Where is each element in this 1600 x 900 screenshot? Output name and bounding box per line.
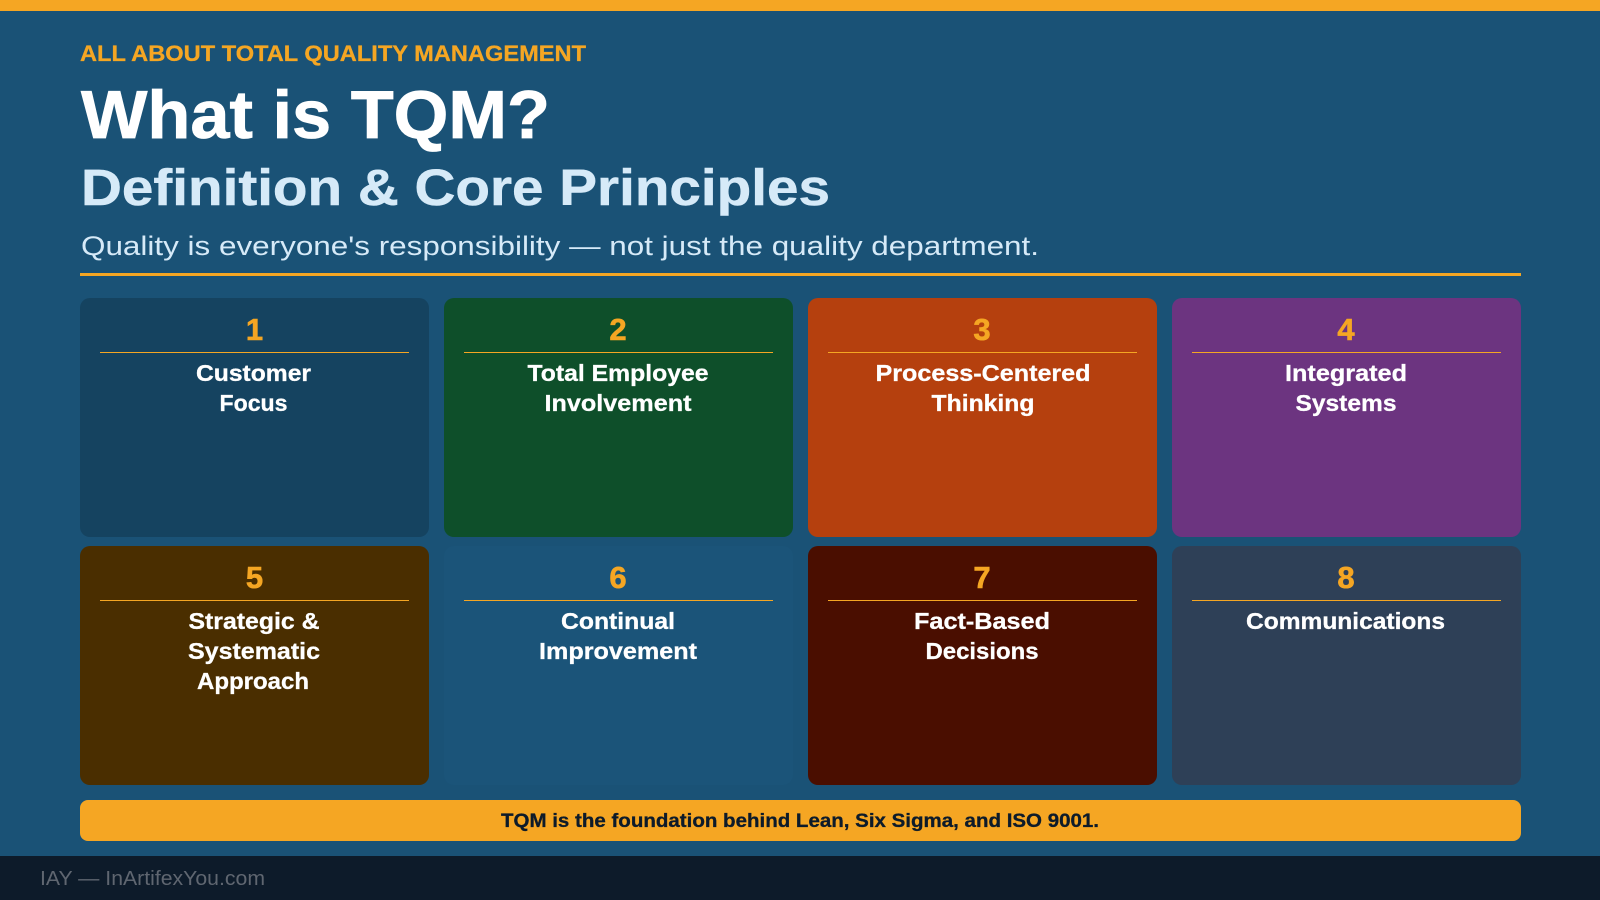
card 8 label: Communications [1246,608,1445,634]
card 2 label [528,360,708,416]
card 1 number: 1 [246,312,263,347]
card 7 label: Decisions [926,638,1038,664]
card 3 label: Process-Centered [876,360,1090,386]
panel: card 6 continual improvement [444,546,793,785]
card 1 label: Customer [196,360,311,386]
card 7 number: 7 [973,560,991,595]
title: What is TQM? [81,77,550,153]
footer [0,856,1600,900]
card 1 label [196,360,311,416]
eyebrow heading: ALL ABOUT TOTAL QUALITY MANAGEMENT [80,41,587,66]
card 4 number: 4 [1337,312,1355,347]
footer: IAY — InArtifexYou.com [40,868,265,890]
callout banner [80,800,1521,841]
card 3 label: Thinking [932,390,1034,416]
top accent bar [0,0,1600,11]
card 4 label: Systems [1296,390,1396,416]
panel: card 8 communications [1172,546,1521,785]
card 6 label: Continual [561,608,675,634]
tagline: Quality is everyone's responsibility — not just the quality department. [81,231,1039,261]
card 7 label: Fact-Based [914,608,1050,634]
panel: card 2 total employee involvement [444,298,793,537]
card 8 number: 8 [1337,560,1355,595]
card 3 number: 3 [973,312,991,347]
card 2 label: Total Employee [528,360,708,386]
card 7 label [914,608,1050,664]
card 6 number: 6 [609,560,627,595]
callout banner: TQM is the foundation behind Lean, Six Sigma, and ISO 9001. [501,811,1099,832]
subtitle: Definition & Core Principles [81,159,830,216]
panel: card 3 process-centered thinking [808,298,1157,537]
panel: card 5 strategic and systematic approach [80,546,429,785]
card 6 label: Improvement [539,638,697,664]
card 5 number: 5 [246,560,263,595]
panel: card 1 customer focus [80,298,429,537]
card 4 label [1285,360,1407,416]
panel: card 4 integrated systems [1172,298,1521,537]
card 5 label: Approach [197,668,309,694]
panel: card 7 fact-based decisions [808,546,1157,785]
card 2 number: 2 [609,312,627,347]
card 5 label [188,608,320,694]
card 3 label [876,360,1090,416]
header rule [80,273,1521,276]
card 1 label: Focus [220,390,288,416]
card 5 label: Strategic & [188,608,320,634]
card 2 label: Involvement [544,390,692,416]
card 5 label: Systematic [188,638,320,664]
card 4 label: Integrated [1285,360,1407,386]
card 6 label [539,608,697,664]
